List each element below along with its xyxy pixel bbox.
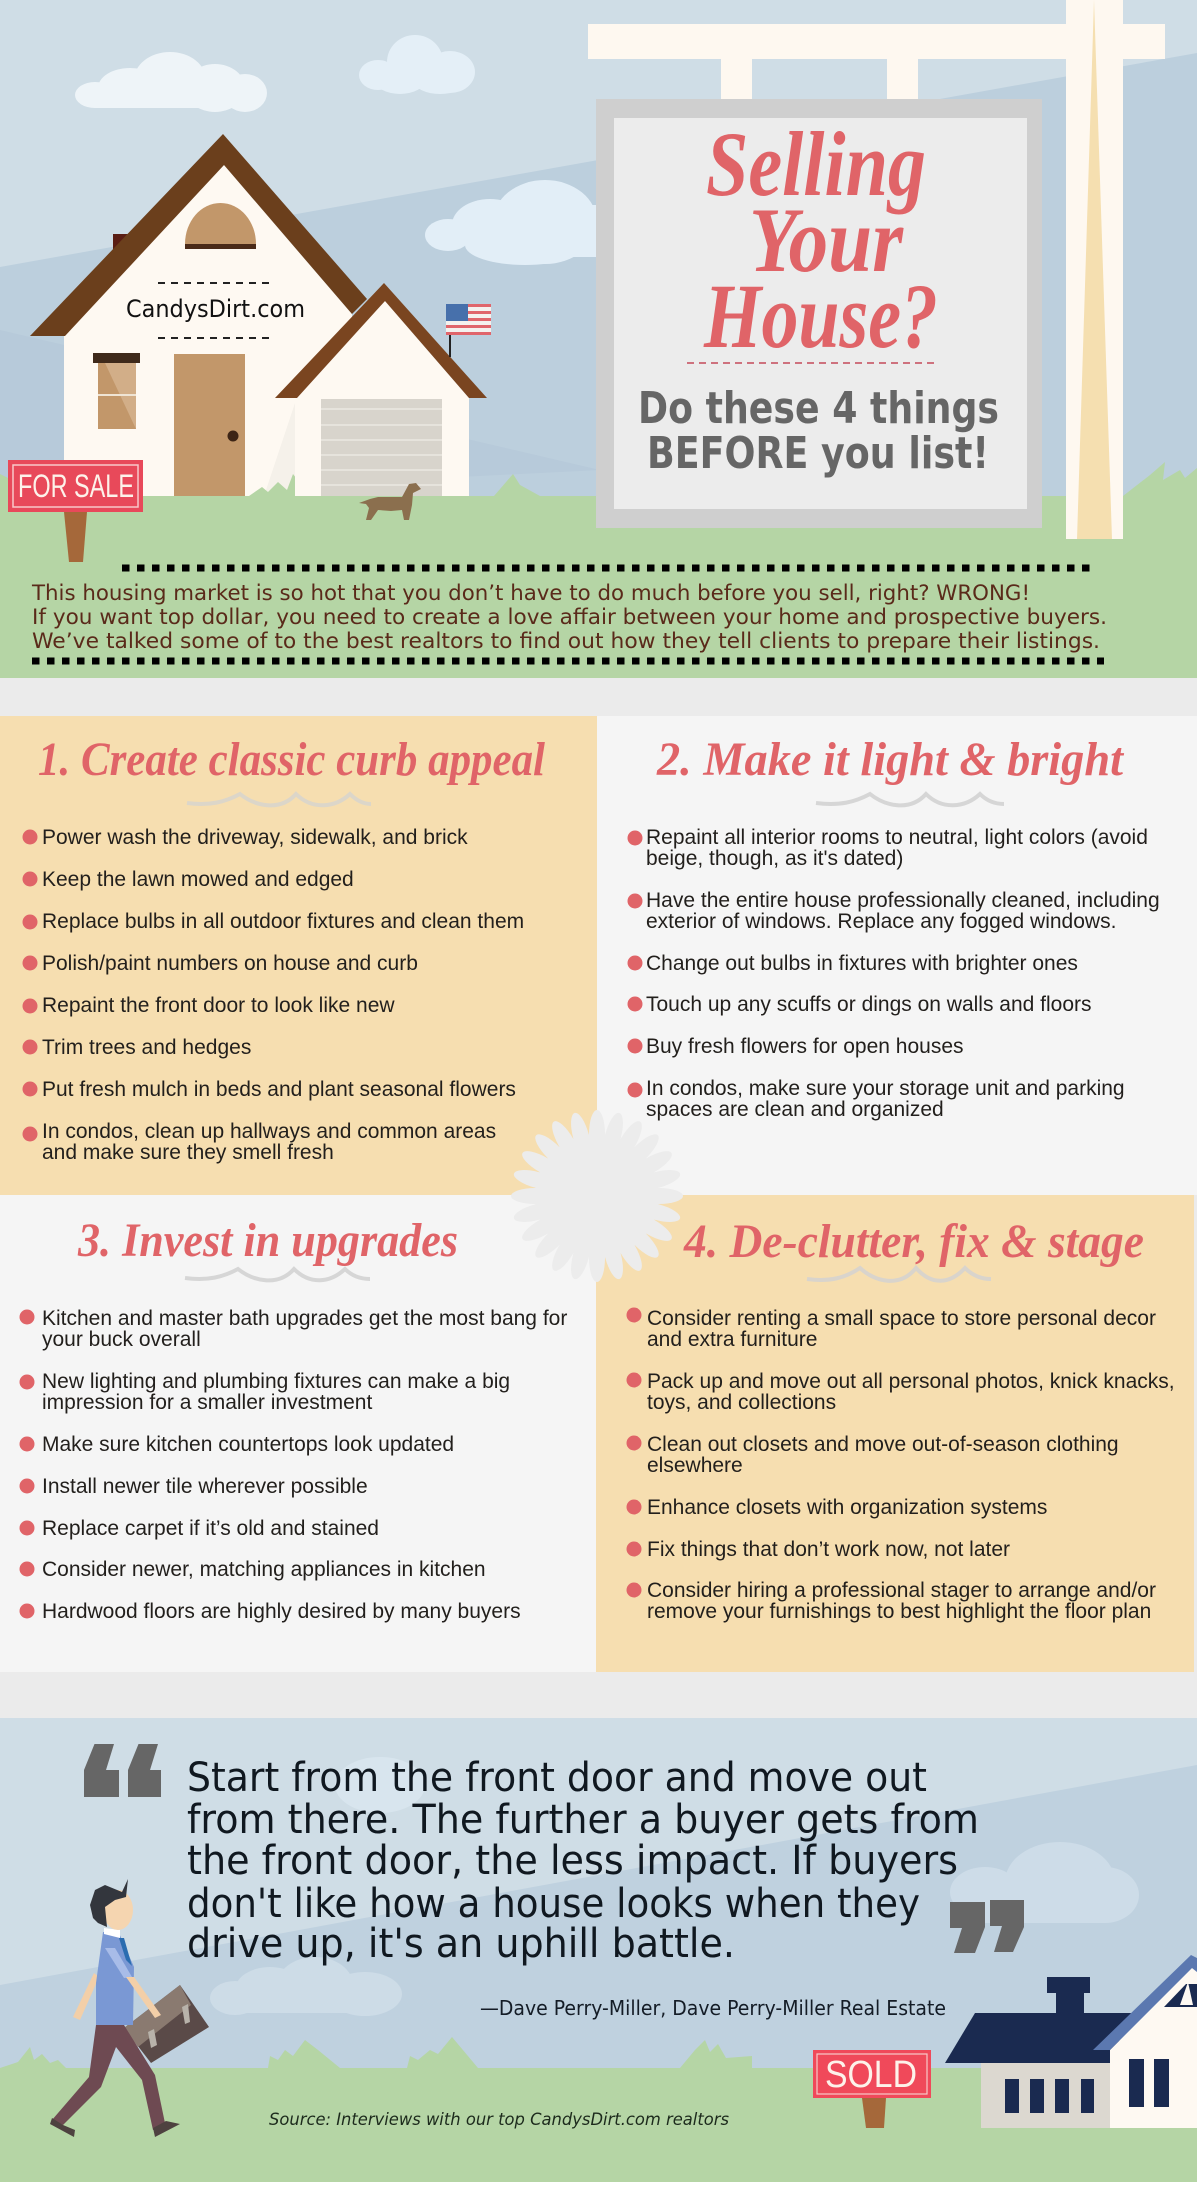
for sale sign: FOR SALE [18, 468, 134, 504]
title [703, 113, 938, 367]
panel: step 2: Change out bulbs in fixtures with brighter ones [646, 952, 1078, 975]
panel: step 2: Buy fresh flowers for open houses [646, 1035, 964, 1058]
panel: step 2: beige, though, as it's dated) [646, 847, 903, 870]
source: Source: Interviews with our top CandysDirt.com realtors [269, 2110, 729, 2130]
icon: dog [359, 483, 421, 520]
panel: step 3: Install newer tile wherever possible [42, 1475, 368, 1498]
signpost [588, 0, 1165, 539]
panel: step 3: New lighting and plumbing fixtures can make a big [42, 1370, 510, 1393]
panel: step 1: Repaint the front door to look like new [42, 994, 395, 1017]
for sale sign [8, 460, 143, 562]
panel: step 2: Have the entire house professionally cleaned, including [646, 889, 1160, 912]
panel: step 2 [597, 716, 1197, 1195]
panel: step 3: Replace carpet if it’s old and stained [42, 1517, 379, 1540]
panel: step 1: and make sure they smell fresh [42, 1141, 334, 1164]
panel: step 3: Kitchen and master bath upgrades get the most bang for [42, 1307, 567, 1330]
panel: step 1: Trim trees and hedges [42, 1036, 251, 1059]
panel: step 1: 1. Create classic curb appeal [38, 733, 546, 786]
panel: step 2: Repaint all interior rooms to neutral, light colors (avoid [646, 826, 1148, 849]
subtitle: Do these 4 things [638, 383, 999, 434]
panel: step 4: Consider hiring a professional stager to arrange and/or [647, 1579, 1156, 1602]
quote text [187, 1755, 979, 1967]
panel: step 1: Keep the lawn mowed and edged [42, 868, 354, 891]
quote text: from there. The further a buyer gets from [187, 1797, 979, 1843]
intro text: We’ve talked some of to the best realtors to find out how they tell clients to prepare their listings. [32, 629, 1100, 653]
ground [0, 2037, 1197, 2182]
intro text: This housing market is so hot that you don’t have to do much before you sell, right? WRONG! [31, 581, 1030, 605]
text: site name: CandysDirt.com [126, 295, 305, 323]
subtitle: BEFORE you list! [647, 428, 989, 479]
panel: step 4: elsewhere [647, 1454, 743, 1477]
window [93, 353, 140, 429]
panel: step 4 [596, 1195, 1194, 1672]
panel: step 1: Polish/paint numbers on house and curb [42, 952, 418, 975]
door [174, 354, 245, 496]
panel: step 3: Make sure kitchen countertops look updated [42, 1433, 454, 1456]
quote text: the front door, the less impact. If buyers [187, 1838, 958, 1884]
panel: step 2: spaces are clean and organized [646, 1098, 944, 1121]
illustration: sold house [945, 1955, 1197, 2128]
panel: step 1 [0, 716, 597, 1195]
quote text: Start from the front door and move out [187, 1755, 927, 1801]
panel: title sign [596, 99, 1042, 528]
panel: step 3: Consider newer, matching appliances in kitchen [42, 1558, 486, 1581]
panel: step 3: Hardwood floors are highly desired by many buyers [42, 1600, 521, 1623]
panel: step 3 [0, 1195, 597, 1672]
panel: step 4: Clean out closets and move out-of-season clothing [647, 1433, 1119, 1456]
sold sign: SOLD [825, 2054, 917, 2096]
panel: hero scene [0, 0, 1197, 678]
decorative starburst [511, 1110, 683, 1282]
panel: step 4: Pack up and move out all personal photos, knick knacks, [647, 1370, 1175, 1393]
panel: step 4: Fix things that don’t work now, not later [647, 1538, 1010, 1561]
illustration: walking man [50, 1879, 209, 2137]
sold sign [813, 2050, 931, 2128]
panel: quote scene [0, 1718, 1197, 2182]
cloud: behind text [335, 1757, 425, 1813]
panel: step 2: exterior of windows. Replace any fogged windows. [646, 910, 1116, 933]
title: House? [703, 265, 938, 367]
panel: step 2: Touch up any scuffs or dings on walls and floors [646, 993, 1092, 1016]
panel: step 3: your buck overall [42, 1328, 201, 1351]
subtitle [638, 383, 999, 479]
panel: step 2: In condos, make sure your storage unit and parking [646, 1077, 1125, 1100]
panel: step 4: Consider renting a small space to store personal decor [647, 1307, 1156, 1330]
panel: step 3: impression for a smaller investment [42, 1391, 372, 1414]
garage [275, 283, 487, 496]
quote text: drive up, it's an uphill battle. [187, 1921, 735, 1967]
panel: step 4: and extra furniture [647, 1328, 817, 1351]
title: Your [749, 189, 904, 291]
panel: step 1: Power wash the driveway, sidewalk, and brick [42, 826, 468, 849]
quote text: don't like how a house looks when they [187, 1881, 920, 1927]
cloud: upper left [75, 52, 267, 112]
icon: american flag [446, 304, 491, 357]
panel: step 4: Enhance closets with organization systems [647, 1496, 1047, 1519]
panel: step 3: 3. Invest in upgrades [77, 1214, 458, 1267]
intro text: If you want top dollar, you need to create a love affair between your home and prospective buyers. [32, 605, 1107, 629]
cloud: centre [425, 180, 597, 265]
attribution: —Dave Perry-Miller, Dave Perry-Miller Real Estate [480, 1996, 946, 2020]
cloud: right [950, 1842, 1139, 1923]
closing quote mark [950, 1900, 1024, 1953]
panel: step 4: remove your furnishings to best highlight the floor plan [647, 1600, 1151, 1623]
cloud: lower left [210, 1957, 402, 2016]
panel: step 1: Put fresh mulch in beds and plant seasonal flowers [42, 1078, 516, 1101]
ground [0, 462, 1197, 678]
panel: step 4: 4. De-clutter, fix & stage [683, 1215, 1144, 1268]
cloud: upper middle [359, 35, 475, 94]
illustration: house [30, 134, 491, 496]
intro text [31, 568, 1107, 661]
panel: step 2: 2. Make it light & bright [656, 733, 1125, 786]
panel: step 4: toys, and collections [647, 1391, 836, 1414]
panel: step 1: Replace bulbs in all outdoor fixtures and clean them [42, 910, 524, 933]
title: Selling [706, 113, 926, 215]
opening quote mark [84, 1744, 161, 1797]
panel: step 1: In condos, clean up hallways and common areas [42, 1120, 496, 1143]
